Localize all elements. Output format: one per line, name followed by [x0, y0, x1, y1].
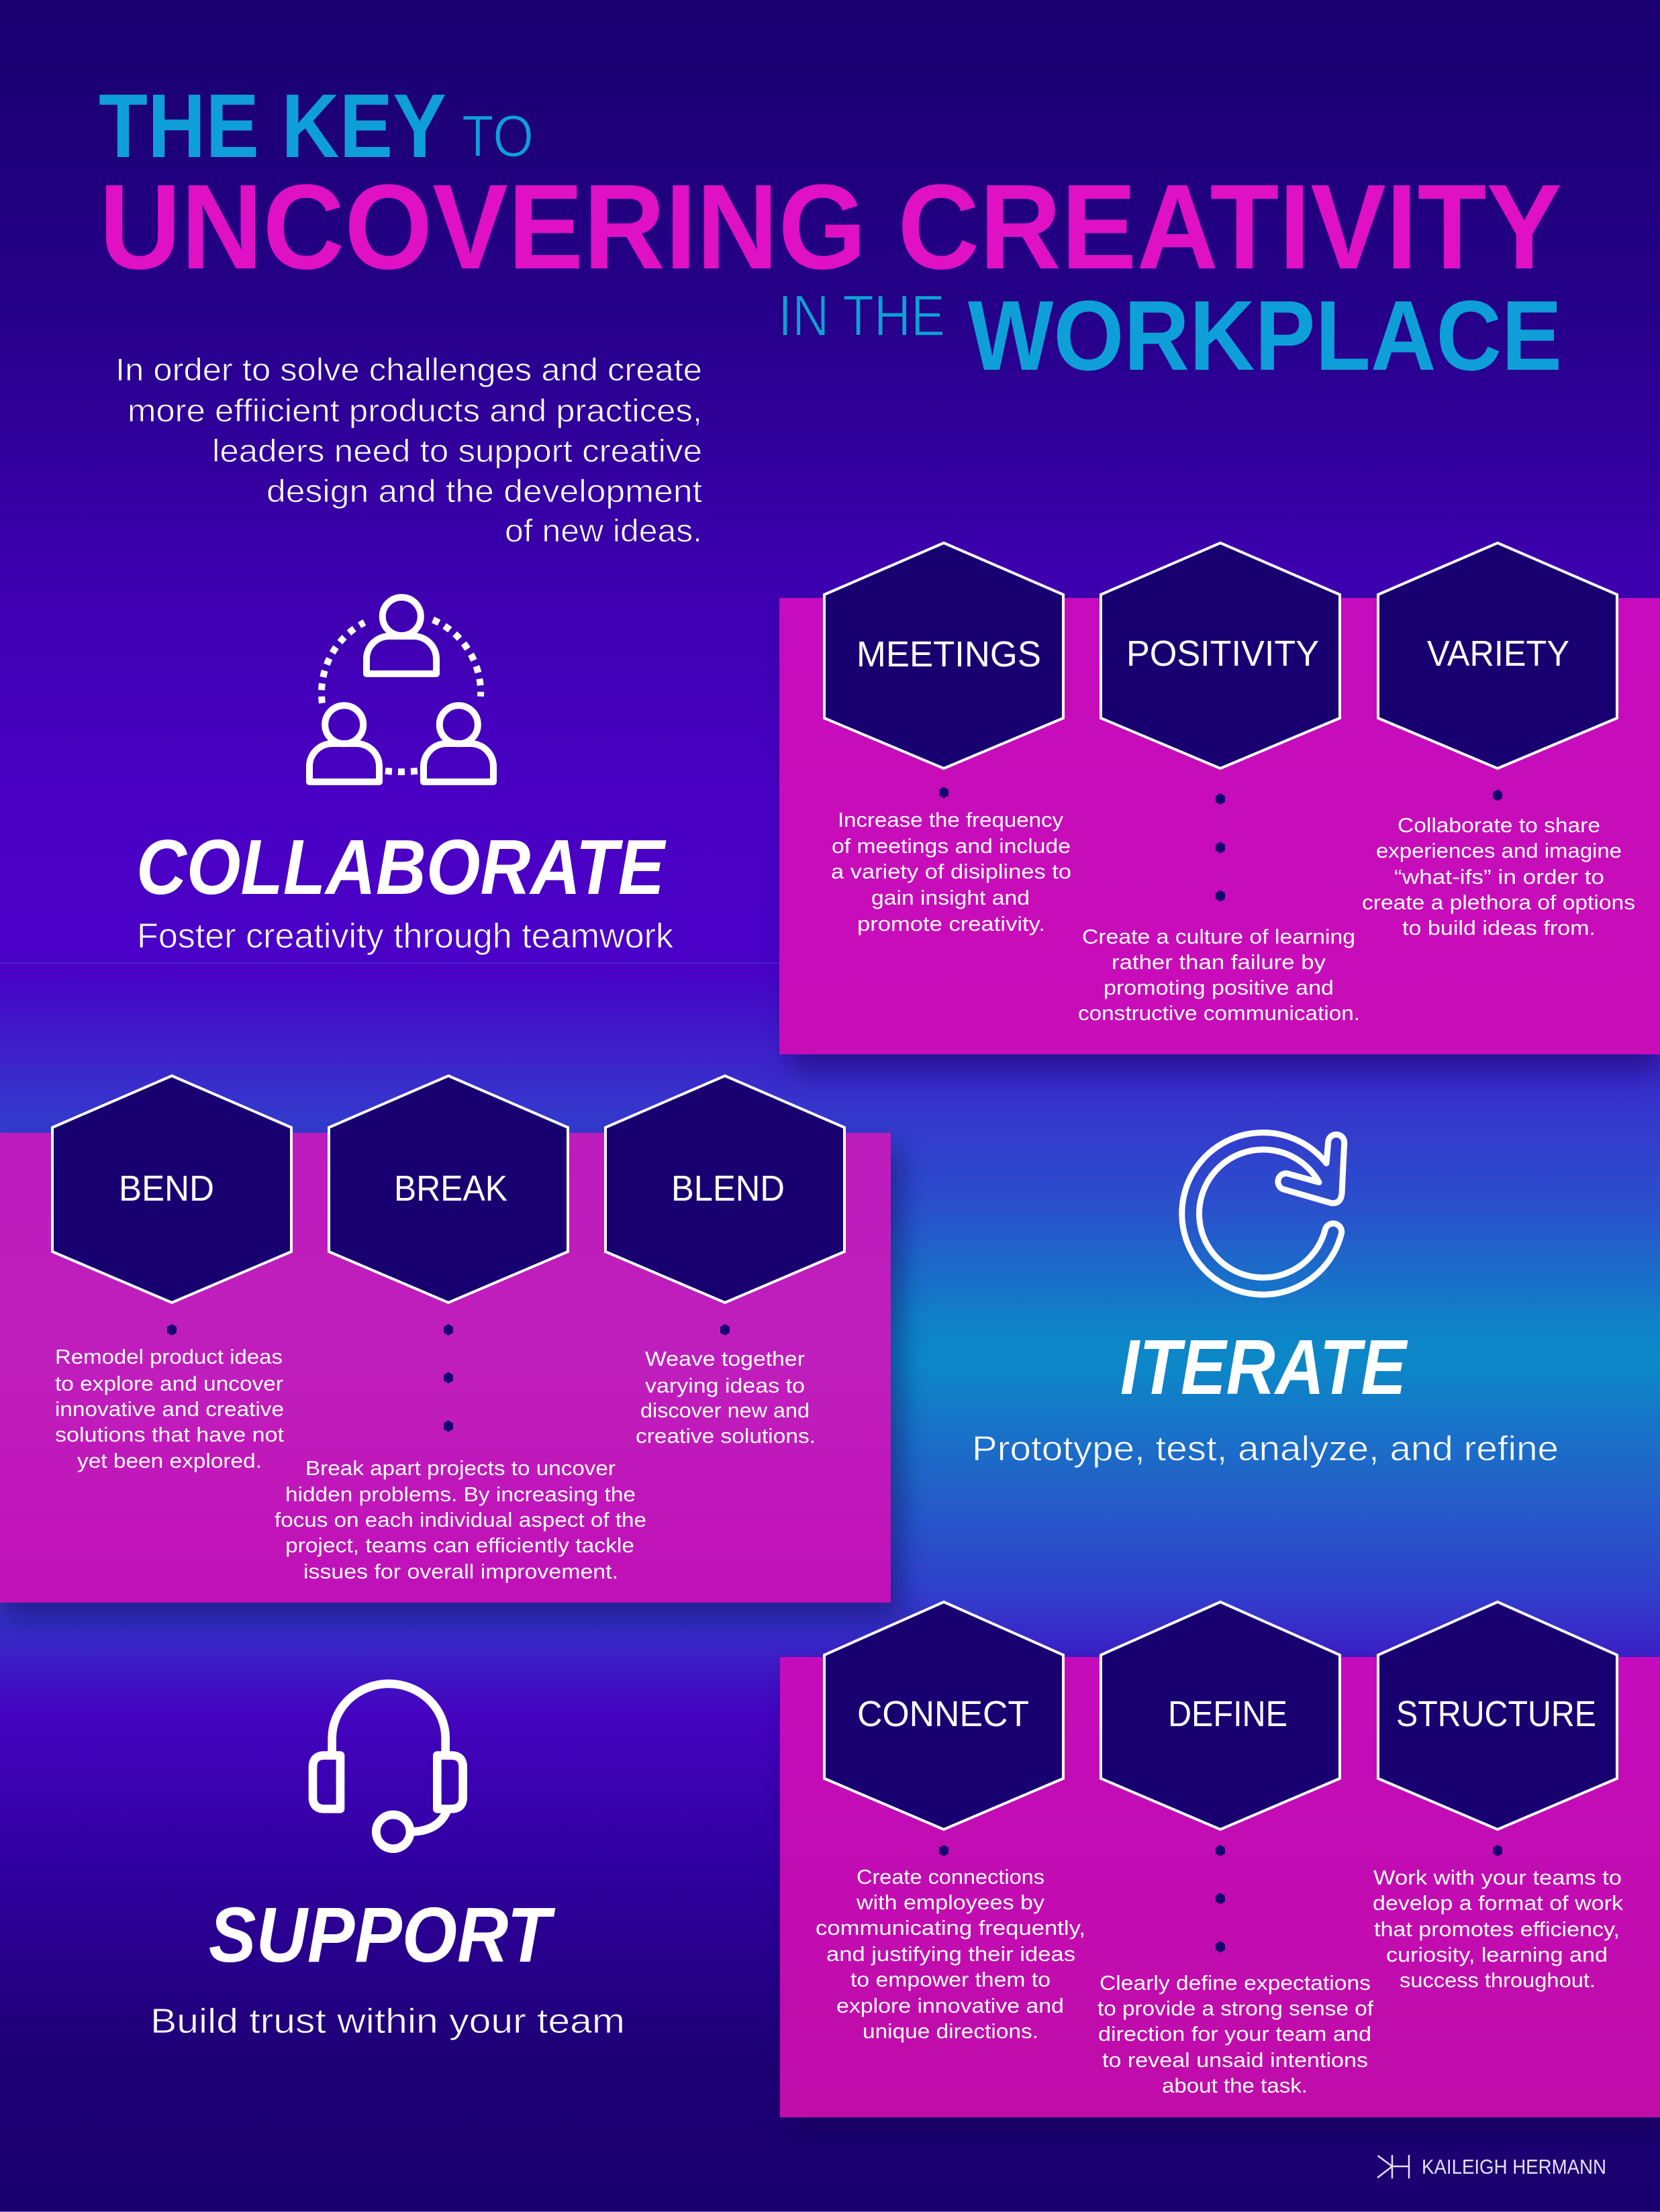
heading: collaborate: COLLABORATE [136, 823, 667, 911]
connect text: unique directions. [863, 2019, 1038, 2043]
bend text [55, 1345, 284, 1472]
icon: collaborate people [309, 597, 493, 782]
bend text: Remodel product ideas [55, 1345, 283, 1368]
meetings hexagon: MEETINGS [857, 634, 1041, 674]
define text [1097, 1971, 1373, 2097]
blend text: discover new and [640, 1399, 810, 1422]
connect text: communicating frequently, [816, 1916, 1085, 1940]
structure hexagon [1378, 1602, 1617, 1829]
define text: direction for your team and [1098, 2022, 1371, 2046]
bend hexagon: BEND [119, 1168, 214, 1209]
variety text: experiences and imagine [1376, 839, 1622, 862]
heading: support: SUPPORT [209, 1891, 556, 1978]
define hexagon [1101, 1602, 1340, 1829]
structure text [1373, 1866, 1624, 1992]
bend hexagon [52, 1076, 291, 1303]
blend hexagon [605, 1076, 844, 1303]
break text: Break apart projects to uncover [305, 1456, 616, 1480]
connect hexagon [824, 1602, 1063, 1829]
variety hexagon: VARIETY [1427, 634, 1569, 674]
connector dots [167, 1324, 730, 1432]
variety text: create a plethora of options [1362, 891, 1635, 914]
positivity text: rather than failure by [1112, 950, 1326, 974]
blend text: creative solutions. [636, 1424, 816, 1448]
blend text: Weave together [645, 1347, 805, 1370]
title [99, 75, 1562, 391]
bend text: yet been explored. [77, 1449, 262, 1472]
break hexagon [329, 1076, 568, 1303]
intro text [115, 352, 702, 548]
break text: hidden problems. By increasing the [285, 1482, 636, 1506]
intro text: more effiicient products and practices, [128, 393, 702, 428]
define text: about the task. [1162, 2074, 1308, 2097]
define text: Clearly define expectations [1100, 1971, 1371, 1995]
connect text: to empower them to [850, 1968, 1051, 1991]
heading: iterate: ITERATE [1120, 1323, 1408, 1411]
meetings hexagon [824, 543, 1063, 768]
positivity text: Create a culture of learning [1082, 925, 1355, 948]
define text: to provide a strong sense of [1097, 1997, 1373, 2020]
intro text: design and the development [266, 473, 702, 509]
structure text: develop a format of work [1373, 1891, 1624, 1915]
subheading: collaborate: Foster creativity through teamwork [137, 917, 674, 956]
connector dots [939, 787, 1502, 902]
variety text: to build ideas from. [1402, 916, 1596, 940]
break text: issues for overall improvement. [303, 1560, 618, 1583]
title: THE KEY [99, 75, 446, 177]
meetings text: a variety of disiplines to [831, 860, 1071, 883]
meetings text: Increase the frequency [838, 808, 1064, 832]
define text: to reveal unsaid intentions [1102, 2048, 1368, 2072]
panel: support [780, 1602, 1660, 2134]
structure text: curiosity, learning and [1386, 1943, 1608, 1966]
connect text: with employees by [856, 1891, 1045, 1914]
break hexagon: BREAK [394, 1168, 507, 1209]
structure hexagon: STRUCTURE [1396, 1694, 1596, 1734]
panel: collaborate [779, 543, 1660, 1071]
positivity text [1078, 925, 1360, 1025]
connect text: explore innovative and [836, 1994, 1064, 2017]
break text [275, 1456, 646, 1583]
connect hexagon: CONNECT [857, 1694, 1029, 1734]
positivity text: promoting positive and [1104, 976, 1334, 999]
icon: iterate arrow [1182, 1133, 1345, 1295]
structure text: success throughout. [1400, 1968, 1596, 1992]
title: TO [462, 103, 534, 169]
meetings text: gain insight and [871, 886, 1030, 909]
break text: focus on each individual aspect of the [275, 1508, 646, 1531]
bend text: solutions that have not [55, 1423, 284, 1446]
title: UNCOVERING CREATIVITY [99, 160, 1562, 295]
variety hexagon [1378, 543, 1617, 768]
intro text: of new ideas. [505, 513, 702, 548]
bend text: to explore and uncover [55, 1372, 283, 1395]
meetings text: promote creativity. [857, 912, 1045, 936]
positivity hexagon [1101, 543, 1340, 768]
intro text: leaders need to support creative [212, 433, 702, 468]
blend text: varying ideas to [645, 1374, 805, 1397]
positivity text: constructive communication. [1078, 1001, 1360, 1025]
icon: KH logo [1377, 2155, 1409, 2178]
connect text: Create connections [857, 1865, 1044, 1889]
footer credit: KAILEIGH HERMANN [1422, 2155, 1606, 2178]
positivity hexagon: POSITIVITY [1126, 634, 1319, 674]
connect text [816, 1865, 1085, 2043]
icon: support headset [313, 1684, 463, 1849]
panel: iterate [0, 1076, 901, 1619]
title: IN THE [778, 284, 945, 348]
title: WORKPLACE [968, 281, 1562, 391]
structure text: that promotes efficiency, [1374, 1917, 1620, 1941]
subheading: support: Build trust within your team [150, 2002, 625, 2041]
variety text: Collaborate to share [1398, 813, 1600, 837]
blend text [636, 1347, 816, 1448]
variety text: “what-ifs” in order to [1394, 865, 1604, 889]
blend hexagon: BLEND [671, 1168, 785, 1209]
break text: project, teams can efficiently tackle [285, 1534, 634, 1557]
bend text: innovative and creative [55, 1397, 284, 1421]
subheading: iterate: Prototype, test, analyze, and refine [972, 1429, 1559, 1468]
define hexagon: DEFINE [1168, 1694, 1287, 1734]
connector dots [939, 1845, 1502, 1953]
intro text: In order to solve challenges and create [115, 352, 702, 387]
meetings text: of meetings and include [832, 834, 1071, 858]
structure text: Work with your teams to [1373, 1866, 1622, 1889]
connect text: and justifying their ideas [826, 1942, 1075, 1966]
meetings text [831, 808, 1071, 936]
variety text [1362, 813, 1635, 940]
